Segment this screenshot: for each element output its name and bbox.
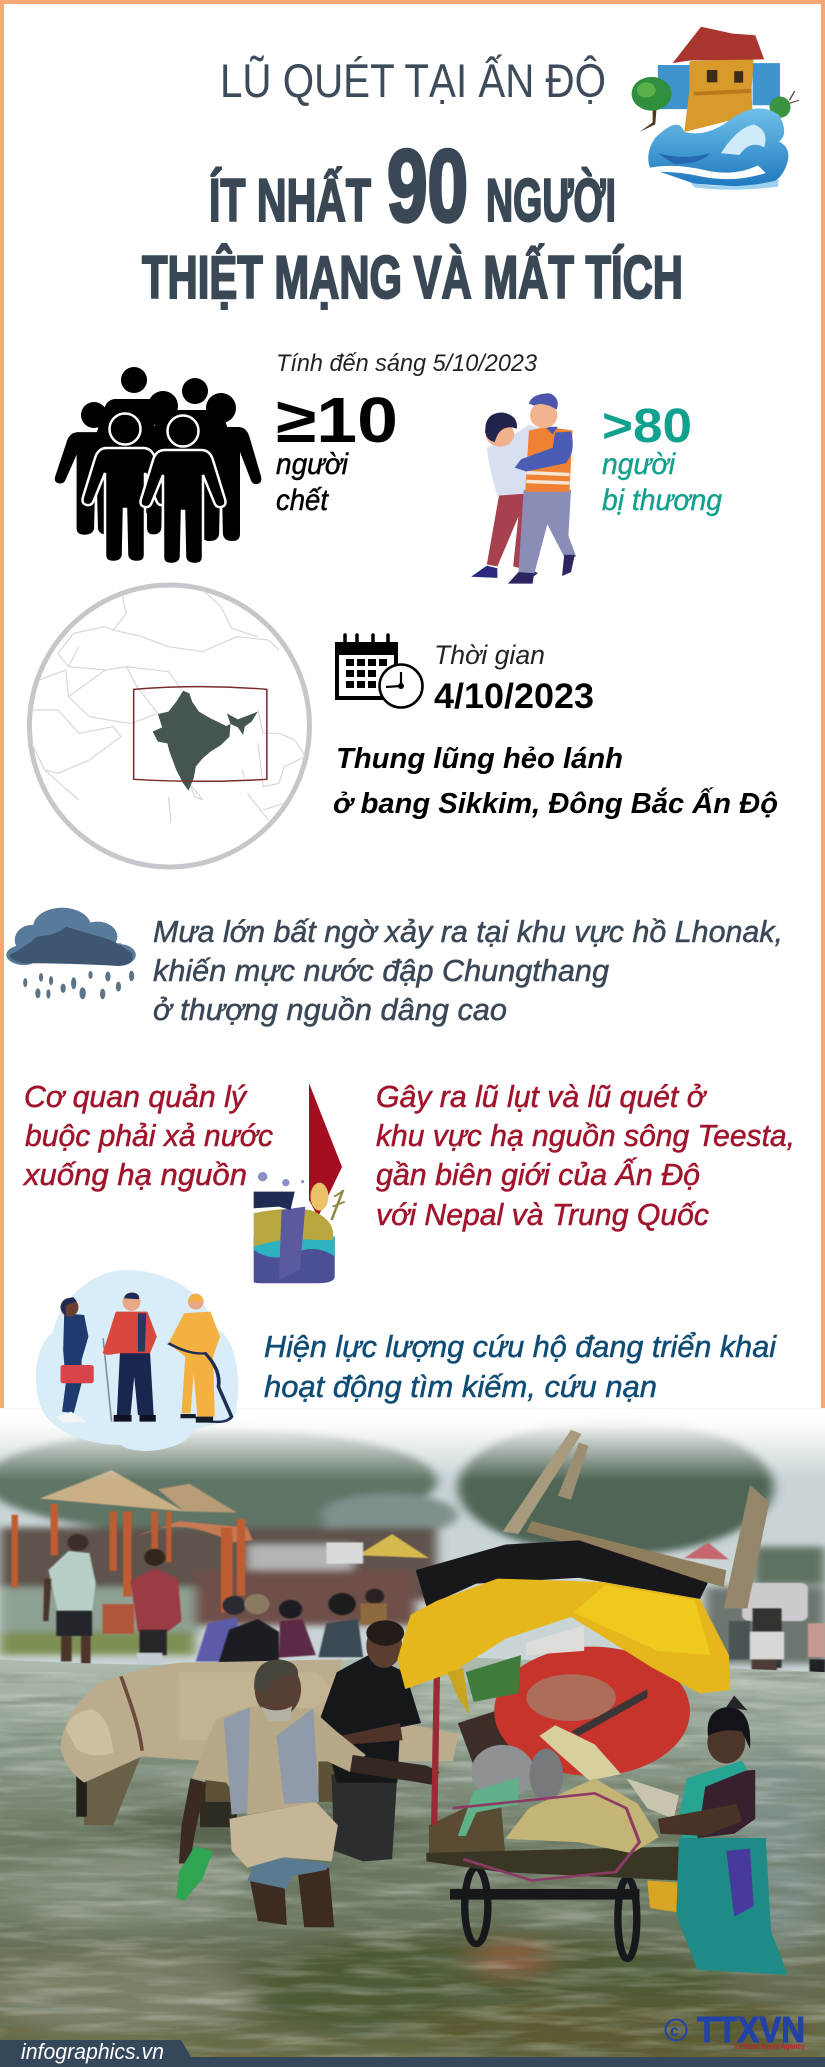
rescue worker: firefighter with hose [168,1294,232,1423]
icon: calendar and clock [335,635,422,708]
text: location: ở bang Sikkim, Đông Bắc Ấn Độ [333,786,778,820]
photo: green bottle [176,1846,213,1901]
text: cause - heavy rain: Mưa lớn bất ngờ xảy ra tại khu vực hồ Lhonak, [153,914,783,949]
map: globe locating India [29,585,309,867]
logo: TTXVN agency: Vietnam News Agency [734,2042,805,2051]
icon: rain cloud [6,908,136,999]
icon: rescuer helping injured person [471,393,576,584]
stat: more than 80 injured [602,400,722,517]
headline: at least 90 people dead and missing [142,129,683,311]
logo: TTXVN agency: c [670,2023,679,2040]
arrow: red pointer [309,1083,342,1217]
photo: woman in teal sari [658,1696,788,1975]
date note: Tính đến sáng 5/10/2023 [276,350,538,377]
text: consequence - flooding downstream: gần biên giới của Ấn Độ [376,1156,700,1192]
icon: crowd of people [55,367,261,564]
stat: at least 10 dead: chết [276,484,330,517]
photo background: trees, sky and stalls [0,1408,825,1689]
text: event date: 4/10/2023 [434,677,594,716]
text: consequence - flooding downstream [376,1079,795,1232]
text: rescue operations [264,1329,777,1404]
photo: fade to white on top [0,1408,825,1480]
stat: at least 10 dead: người [276,448,349,481]
icon: house in flood [632,27,799,190]
rescue worker: medic [56,1297,94,1423]
icon: water discharge [254,1172,345,1283]
text: event date [434,640,594,716]
map: faint country borders [32,590,305,823]
photo: flood water [0,1655,825,2067]
footer source text: infographics.vn [21,2039,164,2064]
text: consequence - flooding downstream: với Nepal và Trung Quốc [376,1197,709,1232]
stat: more than 80 injured: >80 [602,400,692,453]
photo: burlap load on the left cart [61,1659,459,1827]
text: consequence - flooding downstream: Gây ra lũ lụt và lũ quét ở [376,1079,707,1114]
stat: at least 10 dead [276,384,398,517]
text: consequence - flooding downstream: khu vực hạ nguồn sông Teesta, [376,1118,795,1153]
text: authority released water [22,1079,273,1192]
text: rescue operations: hoạt động tìm kiếm, cứu nạn [264,1369,657,1404]
footer bar [0,2040,825,2067]
orange page border [0,0,825,1408]
map: red locator frame [134,687,267,781]
title: flash flood in India: LŨ QUÉT TẠI ẤN ĐỘ [220,54,606,107]
text: location [333,743,778,820]
text: authority released water: buộc phải xả nước [25,1118,273,1153]
headline: at least 90 people dead and missing: ÍT NHẤT [209,167,371,234]
photo: cart with household goods [397,1430,769,1959]
text: authority released water: Cơ quan quản lý [24,1079,248,1114]
text: cause - heavy rain: ở thượng nguồn dâng cao [153,992,507,1027]
headline: at least 90 people dead and missing: NGƯỜI [486,167,616,234]
stat: at least 10 dead: ≥10 [276,384,398,456]
icon: rescue workers [36,1270,238,1451]
photo: flooded street with cart [0,1408,825,2067]
rescue worker: guide with red jacket [103,1292,157,1422]
map: India shape [153,691,258,791]
text: rescue operations: Hiện lực lượng cứu hộ đang triển khai [264,1329,777,1364]
text: location: Thung lũng hẻo lánh [336,743,623,775]
stat: more than 80 injured: bị thương [602,484,722,517]
text: cause - heavy rain [153,914,783,1027]
stat: more than 80 injured: người [602,448,676,481]
text: authority released water: xuống hạ nguồn [22,1157,247,1192]
headline: at least 90 people dead and missing: 90 [387,129,468,243]
photo: old man wading [179,1659,439,1927]
photo: man in black shirt [320,1620,421,1861]
text: cause - heavy rain: khiến mực nước đập Chungthang [153,953,609,988]
text: event date: Thời gian [434,640,545,670]
logo: TTXVN agency: TTXVN [697,2009,805,2050]
